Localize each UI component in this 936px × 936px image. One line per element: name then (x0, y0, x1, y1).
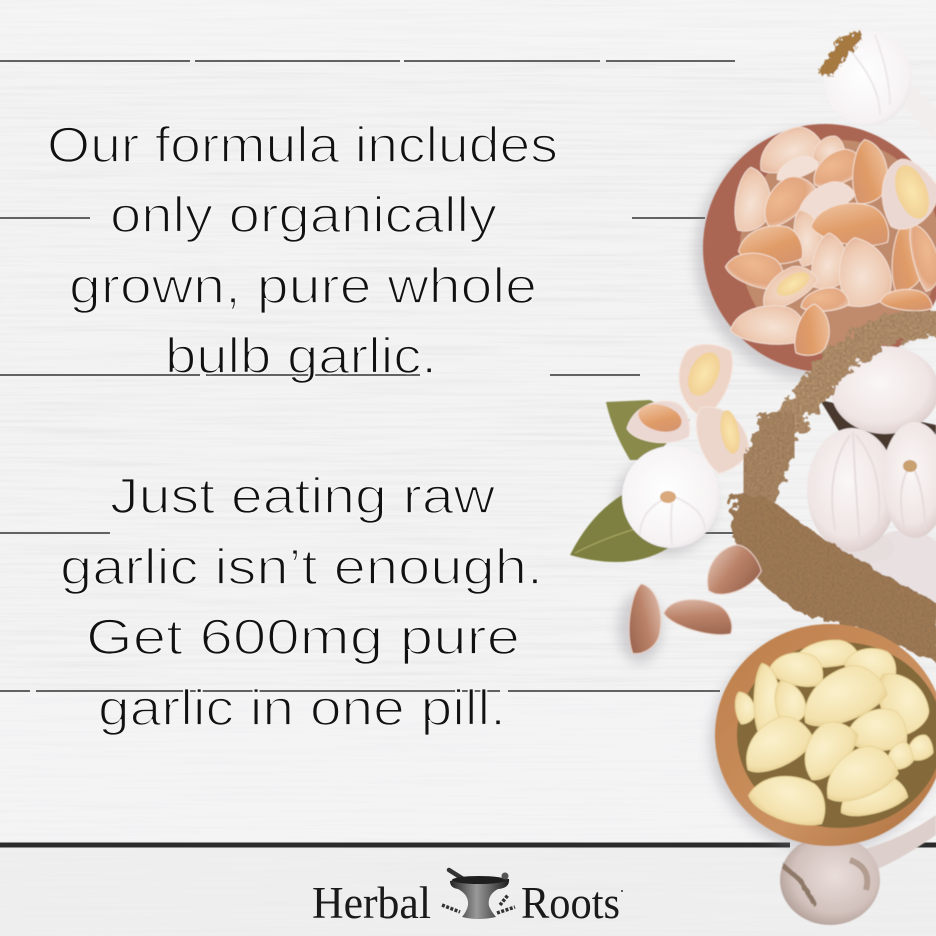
body text block: 600mg message: Get 600mg pure (86, 609, 520, 665)
logo: Herbal Roots (312, 870, 623, 928)
headline text block: formula: bulb garlic. (165, 328, 437, 384)
headline text block: formula: Our formula includes (47, 117, 558, 173)
whole garlic bulb, top (818, 30, 936, 142)
soft object shadows (615, 130, 936, 852)
body text block: 600mg message: Just eating raw (110, 468, 496, 524)
bottom garlic bulb (780, 815, 936, 925)
bay leaves (570, 400, 690, 562)
headline text block: formula: only organically (110, 187, 497, 243)
logo: Herbal Roots: Herbal (312, 878, 431, 928)
body text block: 600mg message: garlic in one pill. (98, 680, 506, 736)
headline text block: formula: grown, pure whole (69, 258, 537, 314)
white garlic bulb, centre (622, 446, 720, 548)
loose cloves under the sack (623, 540, 765, 657)
wooden bowl of peeled cloves (715, 624, 936, 846)
logo: Herbal Roots: Roots (521, 878, 620, 928)
loose cloves near the plate (625, 332, 753, 476)
body text block: 600mg message: garlic isn’t enough. (60, 539, 543, 595)
burlap sack with garlic bulbs (731, 322, 936, 665)
headline text block: formula (47, 117, 558, 384)
plate of unpeeled cloves (703, 122, 936, 372)
garlic photo composition (570, 30, 936, 925)
icon: mortar and pestle (442, 870, 515, 919)
body text block: 600mg message (60, 468, 543, 736)
